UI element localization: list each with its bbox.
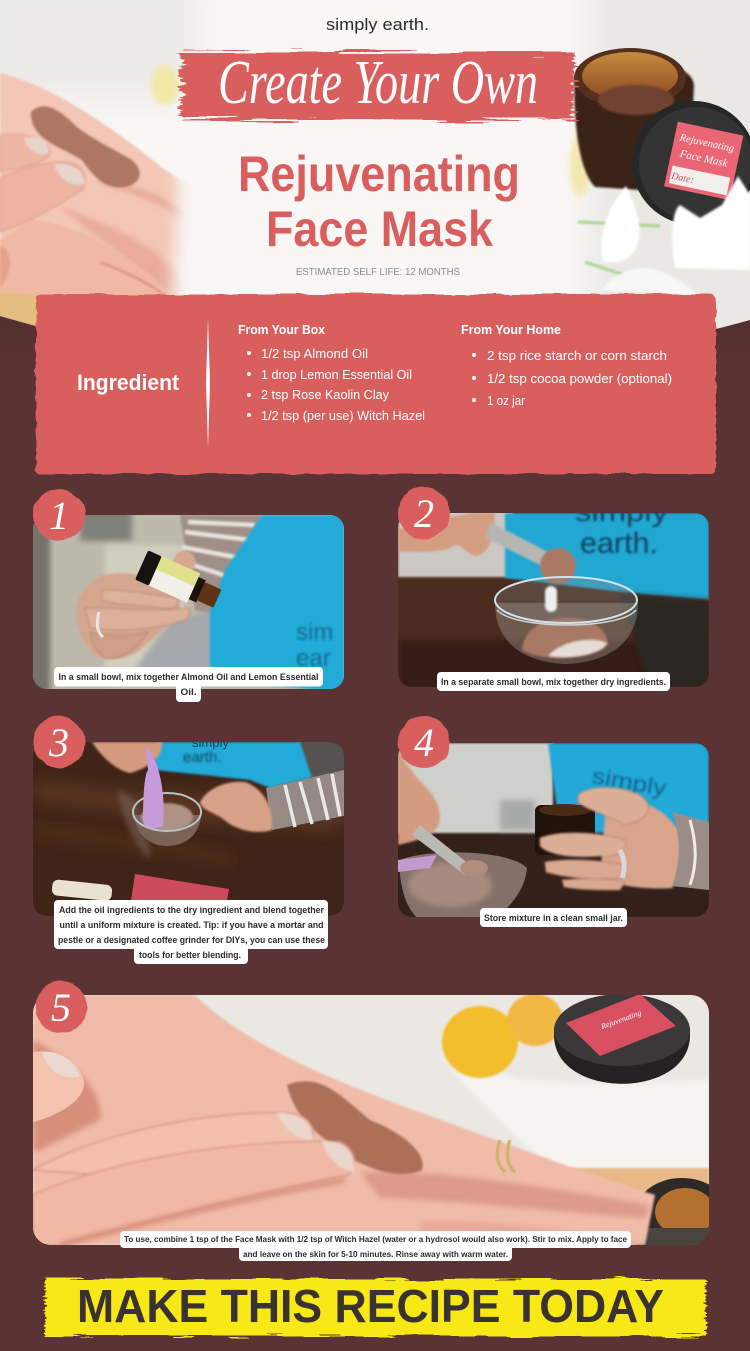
ring bbox=[497, 1140, 515, 1172]
caption: step 1: In a small bowl, mix together Almond Oil and Lemon Essential bbox=[58, 672, 318, 682]
photo: storing mixture: simply bbox=[590, 763, 668, 801]
caption: step 5: and leave on the skin for 5-10 minutes. Rinse away with warm water. bbox=[243, 1249, 508, 1259]
caption: step 3: Add the oil ingredients to the dry ingredient and blend together bbox=[59, 905, 324, 915]
amber jar bbox=[636, 1178, 709, 1245]
jar lid bbox=[554, 994, 690, 1084]
photo: blending: simply bbox=[192, 735, 229, 750]
brush banner bbox=[180, 52, 574, 120]
list: from your box: 1/2 tsp Almond Oil bbox=[261, 346, 368, 361]
logo: simply earth. bbox=[326, 16, 429, 34]
step 2 bbox=[398, 487, 709, 691]
badge: step 3: 3 bbox=[48, 720, 69, 765]
call to action text: MAKE THIS RECIPE TODAY bbox=[77, 1280, 664, 1332]
list: from your box: 1 drop Lemon Essential Oil bbox=[261, 367, 412, 382]
flowers bbox=[442, 994, 563, 1078]
photo: applying mask to hand bbox=[33, 994, 728, 1253]
thumb bbox=[33, 1051, 84, 1122]
glass bowl bbox=[495, 577, 638, 664]
main title: Face Mask bbox=[266, 201, 493, 257]
hand bbox=[33, 995, 655, 1245]
main title bbox=[238, 146, 520, 257]
header photo: jar and lid bbox=[570, 0, 750, 340]
caption: step 2: In a separate small bowl, mix together dry ingredients. bbox=[441, 677, 666, 687]
list: from your home: From Your Home bbox=[461, 323, 561, 337]
step 4 bbox=[398, 716, 709, 927]
caption: step 2 bbox=[437, 672, 670, 691]
jar label: Rejuvenating bbox=[678, 132, 735, 155]
badge: step 2 bbox=[398, 487, 450, 539]
step 1 bbox=[25, 489, 344, 702]
hand holding jar bbox=[540, 788, 681, 890]
fingers bbox=[0, 134, 85, 288]
ingredient heading: Ingredient bbox=[77, 370, 180, 395]
photo: pouring oil: ear bbox=[296, 645, 331, 672]
photo: blending: earth. bbox=[183, 749, 221, 766]
caption: step 3: tools for better blending. bbox=[139, 950, 241, 960]
list: from your home: 1 oz jar bbox=[487, 393, 526, 408]
caption: step 3: pestle or a designated coffee grinder for DIYs, you can use these bbox=[58, 935, 325, 945]
mask smudge bbox=[31, 106, 140, 187]
icon: amber jar bbox=[535, 804, 595, 855]
badge: step 3 bbox=[33, 716, 85, 768]
main title: Rejuvenating bbox=[238, 146, 520, 202]
photo: dry ingredients bbox=[398, 513, 709, 687]
badge: step 5: 5 bbox=[51, 985, 71, 1030]
caption: step 1: Oil. bbox=[180, 687, 196, 697]
jar label: Face Mask bbox=[678, 148, 730, 170]
caption: step 3: until a uniform mixture is created. Tip: if you have a mortar and bbox=[60, 920, 324, 930]
jar lid: Rejuvenating bbox=[599, 1008, 643, 1031]
caption: step 5 bbox=[120, 1231, 631, 1261]
badge: step 2: 2 bbox=[414, 491, 434, 536]
list: from your box bbox=[238, 323, 425, 423]
list: from your box: 1/2 tsp (per use) Witch Hazel bbox=[261, 408, 425, 423]
badge: step 5 bbox=[35, 981, 87, 1033]
shadow under header bbox=[0, 318, 750, 370]
jar label: Date: bbox=[669, 170, 695, 186]
list: from your home bbox=[461, 323, 672, 408]
flowers bbox=[600, 176, 750, 296]
jar label bbox=[664, 122, 743, 200]
header photo: hand with mask bbox=[0, 0, 194, 326]
step 5 bbox=[33, 981, 728, 1261]
bowl bbox=[133, 793, 201, 846]
hand bbox=[76, 551, 195, 660]
caption: step 5: To use, combine 1 tsp of the Face Mask with 1/2 tsp of Witch Hazel (water or a hydrosol would also work). Stir to mix. Apply to face bbox=[124, 1234, 627, 1244]
banner heading: Create Your Own bbox=[218, 49, 538, 117]
photo: dry ingredients: earth. bbox=[580, 527, 658, 560]
header bbox=[0, 0, 750, 329]
photo: dry ingredients: simply bbox=[575, 496, 668, 527]
caption: step 3 bbox=[54, 900, 328, 964]
list: from your home: 2 tsp rice starch or corn starch bbox=[487, 348, 667, 363]
list: from your box: 2 tsp Rose Kaolin Clay bbox=[261, 387, 389, 402]
badge: step 4 bbox=[398, 716, 450, 768]
header background bbox=[0, 0, 750, 372]
step 3 bbox=[33, 716, 344, 964]
panel: ingredients bbox=[36, 294, 716, 474]
shelf life: ESTIMATED SELF LIFE: 12 MONTHS bbox=[296, 266, 460, 278]
icon: oil bottle bbox=[136, 550, 221, 608]
caption: step 4 bbox=[480, 908, 627, 927]
glass bowl with spoon bbox=[398, 825, 527, 920]
smudge of mask bbox=[287, 1081, 423, 1174]
badge: step 1 bbox=[33, 489, 85, 541]
photo: blending bbox=[33, 735, 344, 920]
pressing fingers bbox=[33, 1113, 354, 1245]
photo: pouring oil: sim bbox=[296, 619, 333, 646]
list: from your home: 1/2 tsp cocoa powder (optional) bbox=[487, 371, 672, 386]
caption: step 4: Store mixture in a clean small jar. bbox=[484, 913, 623, 923]
badge: step 4: 4 bbox=[414, 720, 434, 765]
photo: pouring oil bbox=[33, 515, 344, 689]
caption: step 1 bbox=[54, 667, 323, 702]
badge: step 1: 1 bbox=[49, 493, 69, 538]
call to action banner bbox=[45, 1279, 706, 1336]
list: from your box: From Your Box bbox=[238, 323, 325, 337]
photo: storing mixture bbox=[398, 743, 709, 920]
